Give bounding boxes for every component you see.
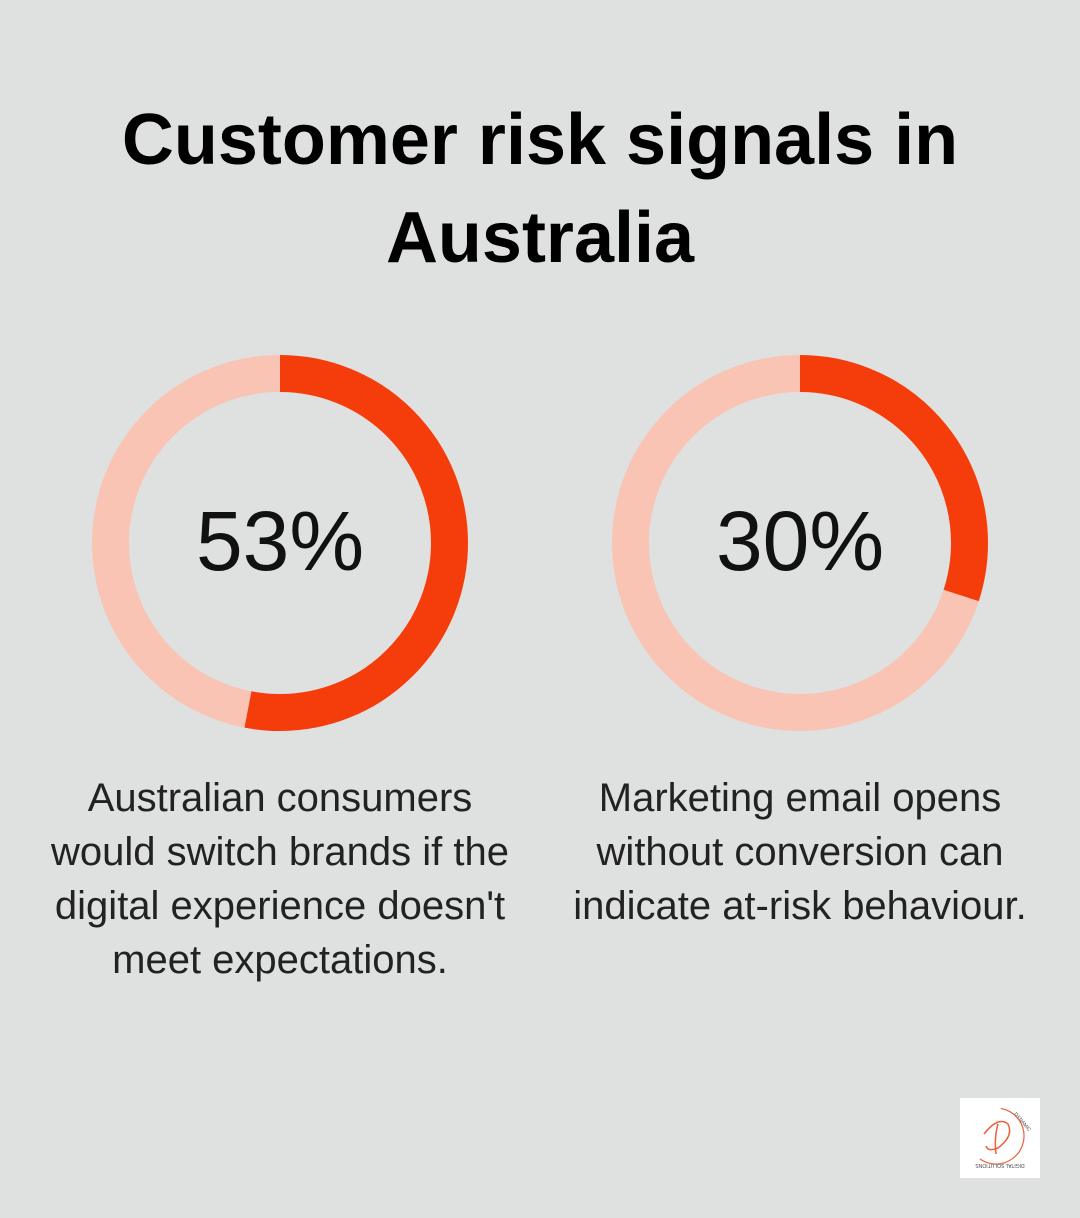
caption: 53% bbox=[51, 776, 509, 982]
caption: 30%: indicate at-risk behaviour. bbox=[573, 884, 1027, 928]
logo: DIGITAL SOLUTIONS bbox=[975, 1162, 1025, 1168]
title: Customer risk signals in bbox=[122, 100, 958, 180]
caption: 30%: Marketing email opens bbox=[599, 776, 1001, 820]
logo: DYNAMIC bbox=[1012, 1111, 1032, 1133]
caption: 30% bbox=[573, 776, 1027, 928]
caption: 53%: meet expectations. bbox=[112, 938, 448, 982]
title: Australia bbox=[386, 198, 694, 278]
donut chart: 30% bbox=[612, 355, 988, 731]
donut chart: 53% bbox=[92, 355, 468, 731]
logo bbox=[960, 1098, 1040, 1178]
donut chart: 53%: 53% bbox=[196, 494, 364, 588]
caption: 30%: without conversion can bbox=[597, 830, 1003, 874]
title bbox=[122, 100, 958, 278]
caption: 53%: Australian consumers bbox=[88, 776, 472, 820]
caption: 53%: digital experience doesn't bbox=[55, 884, 505, 928]
donut chart: 30%: 30% bbox=[716, 494, 884, 588]
caption: 53%: would switch brands if the bbox=[51, 830, 509, 874]
